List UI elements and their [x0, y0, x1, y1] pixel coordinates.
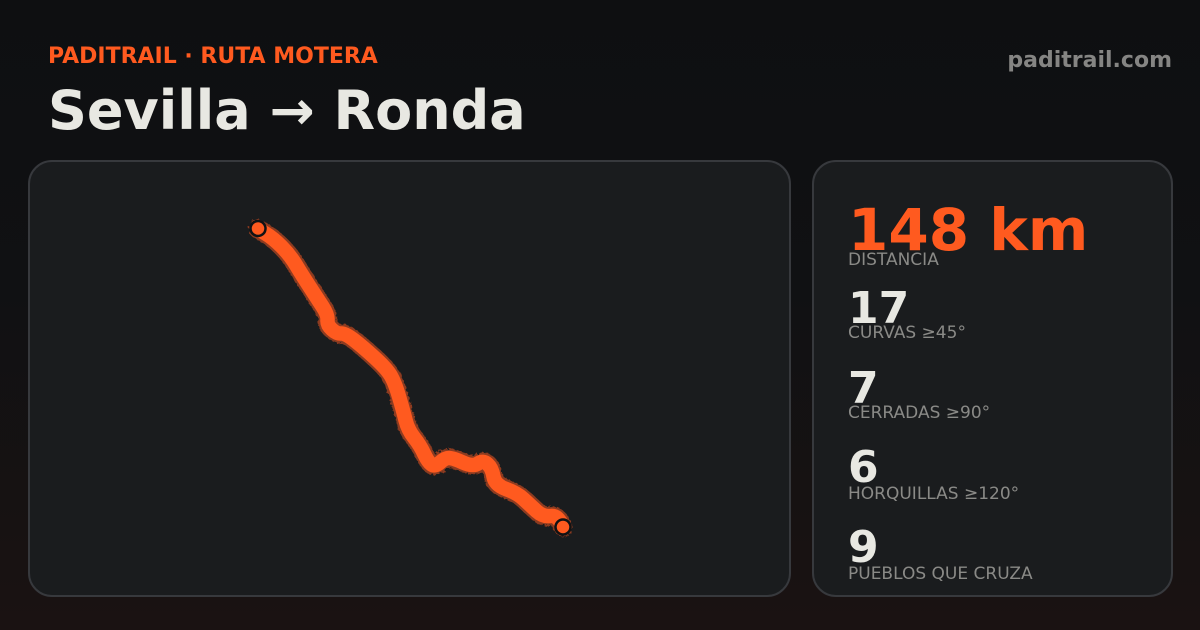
stat: hairpins [848, 442, 1019, 504]
stat: tight bends [848, 363, 990, 423]
distance label: DISTANCIA [848, 250, 939, 270]
curves label: CURVAS ≥45° [848, 323, 966, 343]
curves value: 17 [848, 283, 909, 334]
towns label: PUEBLOS QUE CRUZA [848, 564, 1033, 584]
tight bends value: 7 [848, 363, 879, 414]
end marker [556, 520, 570, 534]
towns value: 9 [848, 522, 879, 573]
stat: curves [848, 283, 966, 343]
tight bends label: CERRADAS ≥90° [848, 403, 990, 423]
distance value: 148 km [848, 196, 1088, 264]
start marker [250, 221, 266, 236]
panel: route map [28, 160, 791, 597]
stat: distance [848, 196, 1088, 270]
hairpins value: 6 [848, 442, 879, 493]
site url: paditrail.com [1007, 48, 1172, 73]
title: Sevilla → Ronda [48, 79, 526, 142]
hairpins label: HORQUILLAS ≥120° [848, 484, 1019, 504]
panel: stats [812, 160, 1173, 597]
eyebrow heading: PADITRAIL · RUTA MOTERA [48, 44, 378, 69]
route line [258, 229, 563, 527]
stat: towns [848, 522, 1033, 584]
